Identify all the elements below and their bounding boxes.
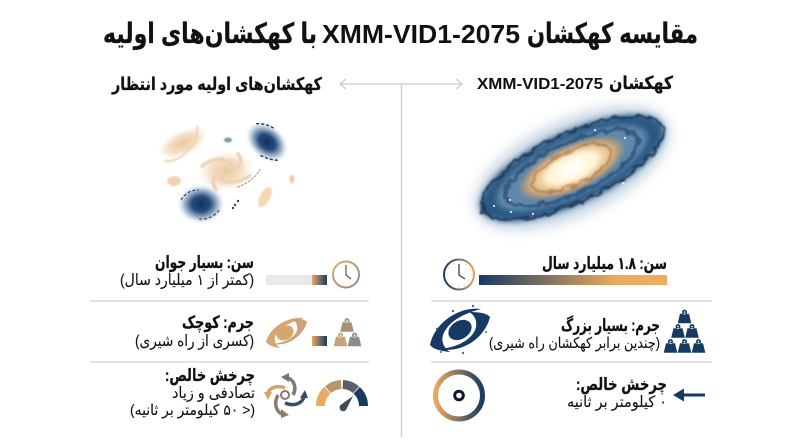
galaxy: tan top left [153, 120, 213, 166]
column heading: XMM-VID1-2075 [477, 73, 673, 94]
icon: tan galaxy [266, 318, 307, 348]
icon: weights pyramid [664, 310, 705, 353]
icon: clock [444, 260, 474, 290]
icon: left arrow [673, 388, 705, 402]
arrow: comparison connector [340, 79, 462, 437]
text: spin value: تصادفی و زیاد [172, 385, 255, 403]
row: left age [120, 253, 359, 289]
icon: weights [334, 318, 361, 346]
text: mass note: (کسری از راه شیری) [135, 333, 254, 350]
divider [90, 300, 369, 302]
row: left mass [135, 313, 361, 350]
title: با کهکشان‌های اولیه [103, 18, 317, 50]
title: مقایسه کهکشان [527, 18, 698, 50]
text: spin speed: (< ۵۰ کیلومتر بر ثانیه) [130, 402, 255, 419]
illustration: massive spiral galaxy [458, 82, 686, 254]
row: right mass [430, 305, 705, 354]
galaxy: tan small [167, 176, 181, 186]
text: mass note: (چندین برابر کهکشان راه شیری) [489, 335, 660, 352]
galaxy: navy top right [238, 114, 296, 170]
icon: random rotation arrows [264, 373, 308, 418]
column heading: early galaxies: کهکشان‌های اولیه مورد انتظار [111, 74, 323, 95]
divider [431, 300, 712, 302]
bar: age [266, 275, 327, 285]
title: XMM-VID1-2075 [322, 19, 520, 49]
icon: navy spiral galaxy [430, 305, 490, 354]
bar: small mass [312, 336, 327, 346]
row: right age [444, 254, 667, 290]
row: left spin [130, 366, 364, 419]
galaxy: navy bottom [177, 184, 225, 224]
icon: clock [333, 262, 359, 288]
icon: zero rotation ring [436, 372, 482, 419]
text: age value: سن: ۱.۸ میلیارد سال [542, 254, 667, 274]
galaxy: tan centre [195, 145, 263, 196]
divider [431, 361, 712, 363]
icon: speed gauge [320, 384, 364, 411]
divider [90, 361, 369, 363]
column heading: XMM-VID1-2075: XMM-VID1-2075 [477, 76, 603, 93]
text: age label: سن: بسیار جوان [155, 253, 254, 273]
text: spin value: ۰ کیلومتر بر ثانیه [567, 394, 667, 411]
illustration: small early galaxies [153, 114, 296, 224]
text: spin label: چرخش خالص: [576, 375, 667, 395]
title [103, 18, 698, 50]
text: age note: (کمتر از ۱ میلیارد سال) [120, 272, 254, 289]
text: mass value: جرم: بسیار بزرگ [561, 316, 660, 336]
row: right spin [436, 372, 705, 419]
text: spin label: چرخش خالص: [165, 366, 255, 386]
bar: age [479, 275, 667, 285]
text: mass label: جرم: کوچک [182, 313, 254, 333]
column heading: XMM-VID1-2075: کهکشان [609, 73, 673, 94]
